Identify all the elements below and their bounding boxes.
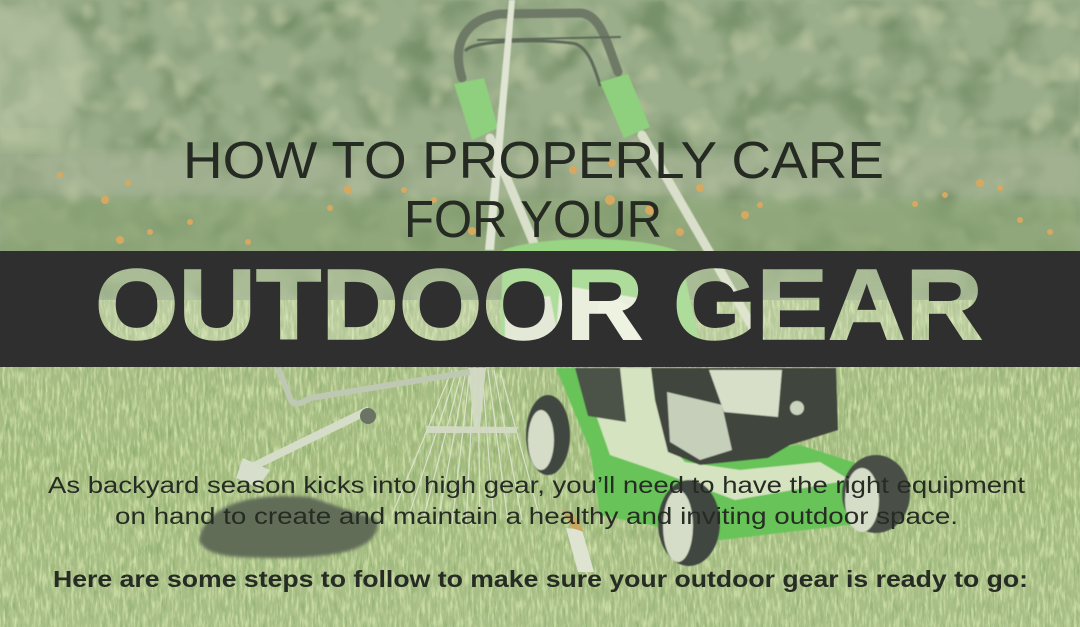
flower bed — [0, 159, 1080, 296]
bold call to action: Here are some steps to follow to make sure your outdoor gear is ready to go: — [53, 566, 1028, 592]
mower handle bars — [458, 13, 760, 340]
engine — [651, 368, 838, 465]
title band — [0, 251, 1080, 367]
title: how to properly care: HOW TO PROPERLY CARE — [183, 132, 884, 190]
lawn mower — [454, 0, 910, 566]
lawn — [0, 300, 1080, 627]
title: for your: FOR YOUR — [404, 191, 662, 249]
hand trowel — [562, 510, 594, 572]
leaf rake — [392, 368, 539, 526]
garden foliage backdrop — [0, 0, 1080, 300]
title: outdoor gear knockout: OUTDOOR GEAR — [95, 249, 983, 361]
string trimmer — [199, 368, 470, 558]
mower wheels — [526, 395, 570, 475]
mower handle grips — [454, 78, 498, 140]
rake pole — [485, 0, 515, 250]
intro paragraph: As backyard season kicks into high gear, you’ll need to have the right equipment — [48, 472, 1026, 498]
intro paragraph — [48, 472, 1026, 529]
mower hood — [500, 239, 700, 345]
mower deck — [556, 368, 892, 540]
intro paragraph: on hand to create and maintain a healthy and inviting outdoor space. — [115, 503, 958, 529]
